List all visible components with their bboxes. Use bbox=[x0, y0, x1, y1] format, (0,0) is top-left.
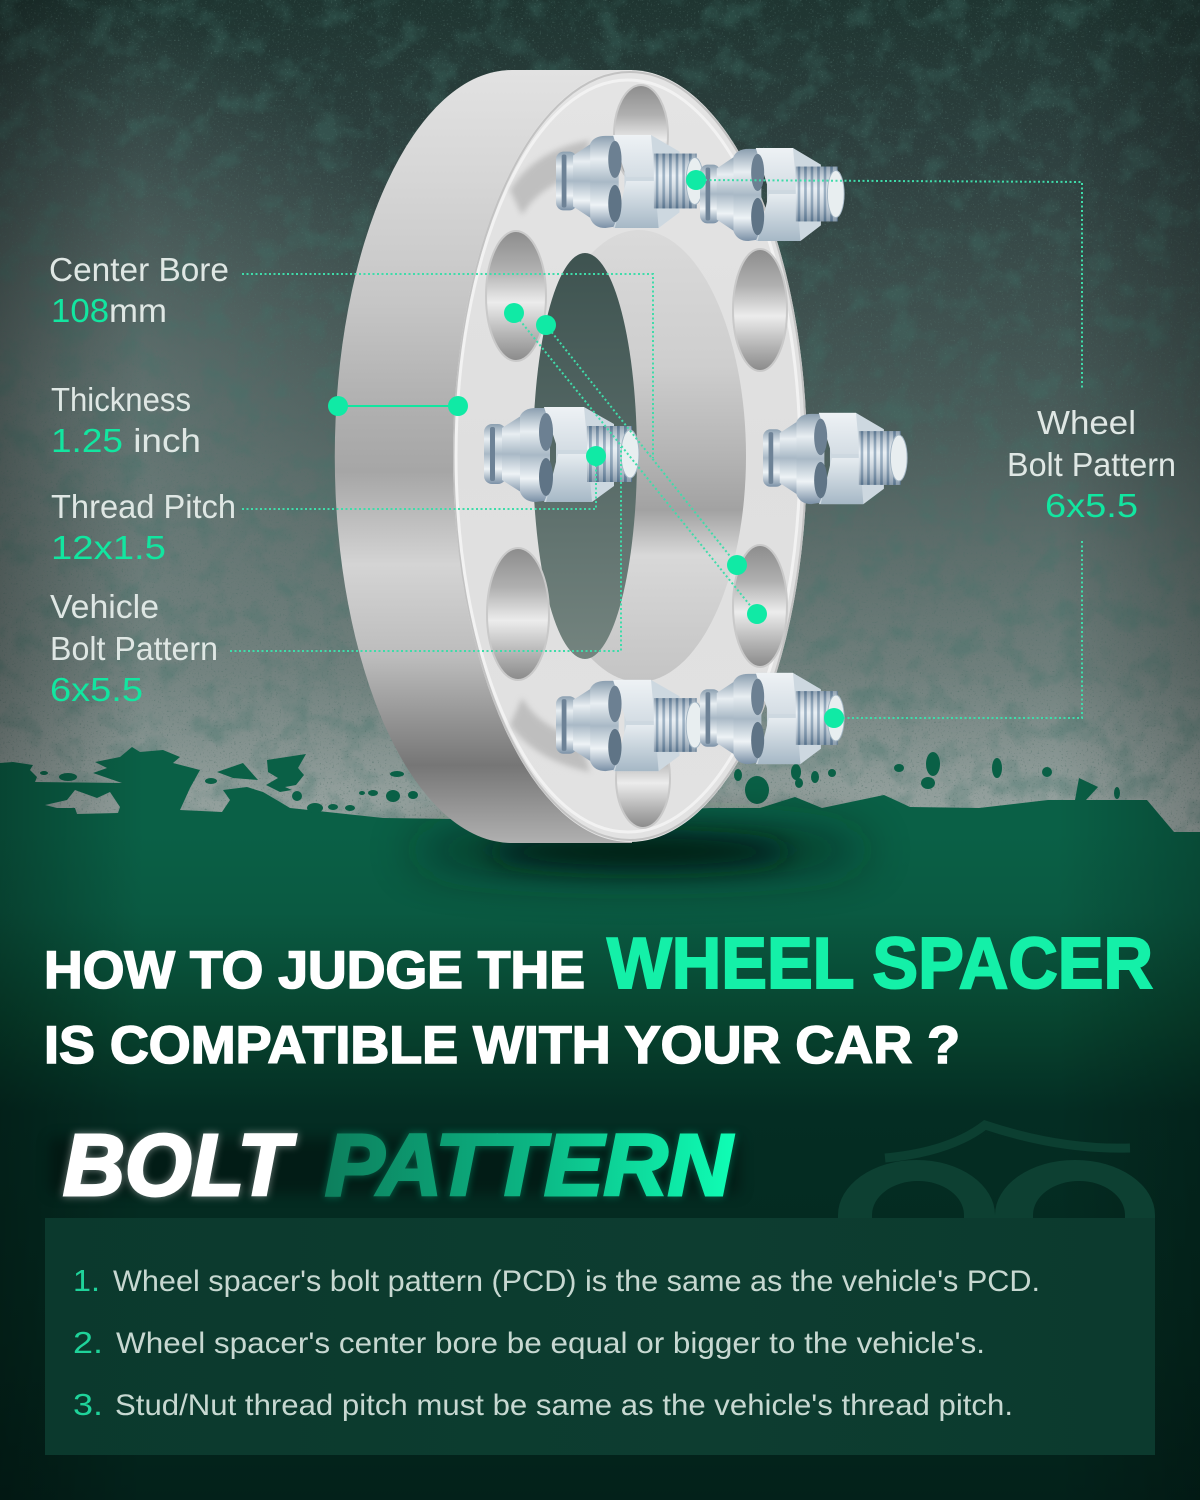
bolt holes bbox=[486, 85, 787, 828]
heading: how to judge: HOW TO JUDGE THE bbox=[44, 941, 585, 1000]
label: vehicle bolt pattern: Vehicle bbox=[50, 588, 159, 625]
stud: top right bbox=[700, 148, 844, 241]
soft text glow bbox=[63, 1117, 734, 1214]
heading: bolt pattern bbox=[50, 1117, 740, 1214]
label: thread pitch: 12x1.5 bbox=[51, 529, 166, 566]
label: wheel bolt pattern: Wheel bbox=[1037, 404, 1136, 441]
item 3: 3. bbox=[73, 1387, 103, 1422]
item 1: Wheel spacer's bolt pattern (PCD) is the same as the vehicle's PCD. bbox=[113, 1265, 1040, 1298]
watermark logo bbox=[838, 1125, 1155, 1219]
stud: bottom right bbox=[700, 673, 844, 764]
label: wheel bolt pattern: Bolt Pattern bbox=[1007, 446, 1176, 483]
stud: middle right bbox=[763, 413, 907, 504]
label: thickness: Thickness bbox=[51, 381, 191, 418]
item 2: 2. bbox=[73, 1325, 103, 1360]
label: thickness: 1.25 inch bbox=[51, 422, 201, 459]
heading: bolt pattern: BOLT bbox=[63, 1117, 297, 1214]
label: vehicle bolt pattern bbox=[50, 588, 218, 708]
heading: how to judge bbox=[44, 924, 1153, 1075]
front face bbox=[453, 70, 807, 842]
heading: how to judge: IS COMPATIBLE WITH YOUR CAR ? bbox=[44, 1016, 960, 1075]
item 3: Stud/Nut thread pitch must be same as the vehicle's thread pitch. bbox=[115, 1389, 1013, 1422]
dark backing bbox=[50, 1138, 740, 1194]
center bore wall bbox=[532, 230, 746, 682]
label: wheel bolt pattern bbox=[1007, 404, 1176, 524]
soft text glow: BOLT bbox=[63, 1117, 297, 1214]
item 1: 1. bbox=[73, 1263, 100, 1298]
label: thread pitch: Thread Pitch bbox=[51, 488, 236, 525]
label: center bore bbox=[49, 251, 229, 329]
label: wheel bolt pattern: 6x5.5 bbox=[1045, 487, 1138, 524]
leader lines bbox=[230, 180, 1082, 718]
callout dots bbox=[328, 170, 844, 728]
label: thread pitch bbox=[51, 488, 236, 566]
soft text glow: PATTERN bbox=[325, 1117, 734, 1214]
heading: bolt pattern: PATTERN bbox=[325, 1117, 734, 1214]
stud: middle left bbox=[484, 407, 639, 502]
wheel spacer disc bbox=[335, 70, 807, 843]
outer band bbox=[335, 70, 632, 843]
item 2: Wheel spacer's center bore be equal or bigger to the vehicle's. bbox=[116, 1327, 985, 1360]
label: center bore: Center Bore bbox=[49, 251, 229, 288]
background: grey-green upper area bbox=[0, 0, 1200, 860]
label: center bore: 108mm bbox=[51, 292, 167, 329]
face highlights bbox=[510, 140, 590, 772]
label: thickness bbox=[51, 381, 201, 459]
label: vehicle bolt pattern: 6x5.5 bbox=[50, 671, 143, 708]
heading: how to judge: WHEEL SPACER bbox=[607, 924, 1153, 1004]
stud: top left bbox=[556, 135, 703, 228]
wheel shadow bbox=[410, 828, 870, 872]
panel: compatibility checklist bbox=[45, 1218, 1155, 1455]
stud: bottom left bbox=[556, 680, 703, 771]
see-through hole bbox=[533, 253, 637, 659]
label: vehicle bolt pattern: Bolt Pattern bbox=[50, 630, 218, 667]
